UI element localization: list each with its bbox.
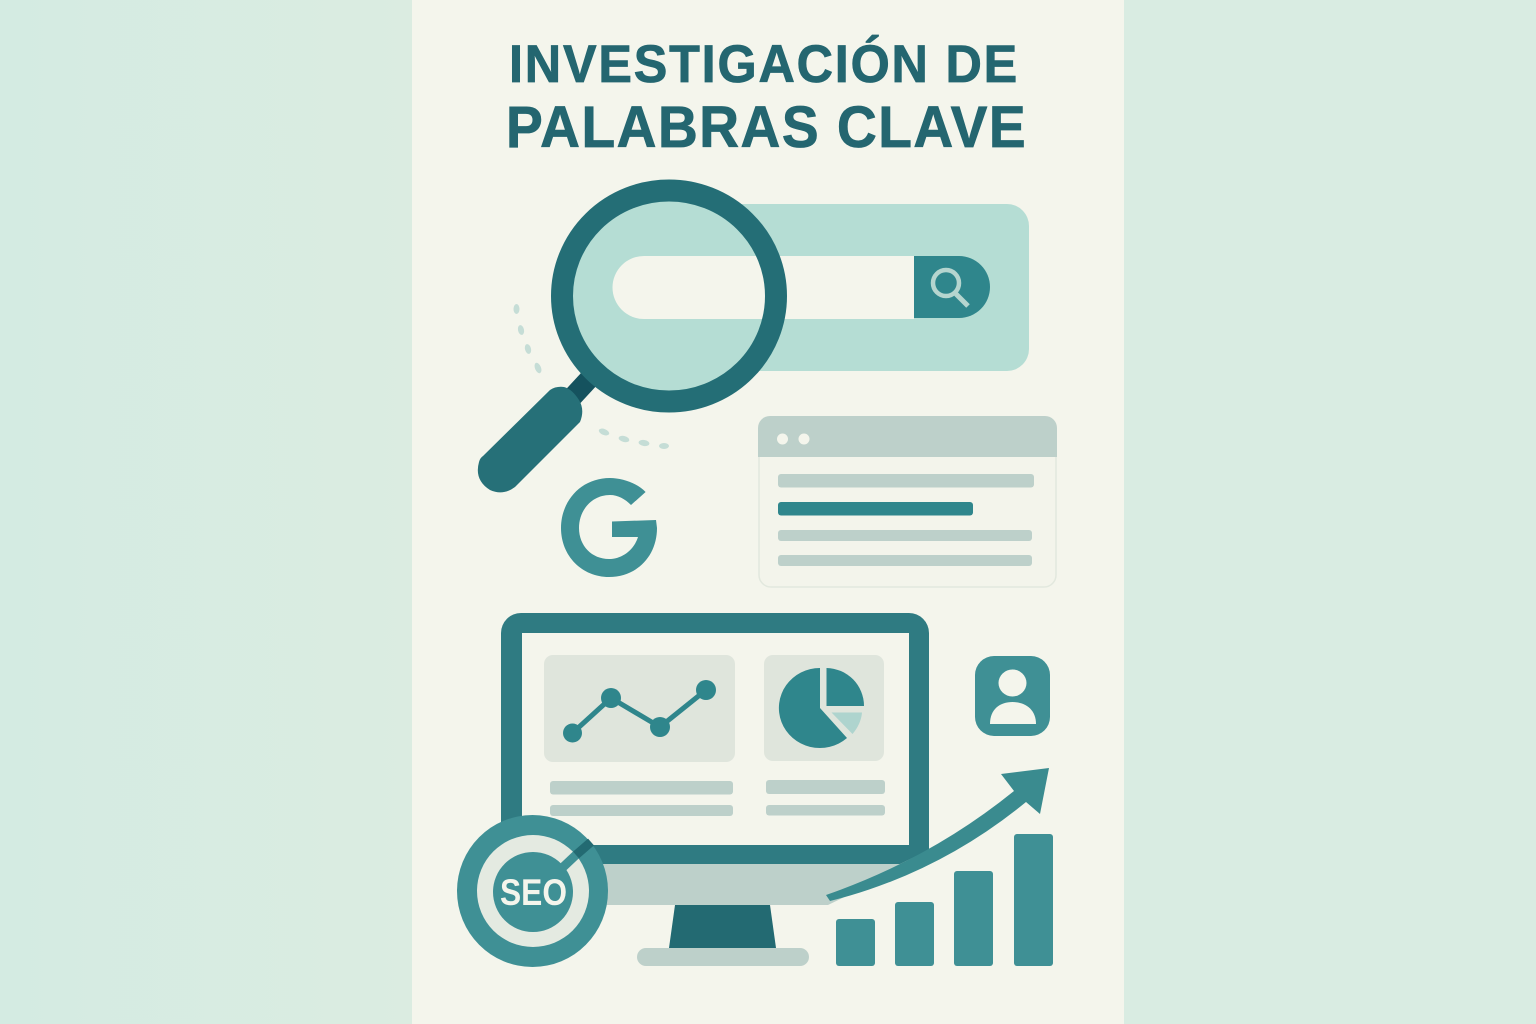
magnifying glass xyxy=(478,190,776,492)
line chart card xyxy=(544,655,735,762)
window dots xyxy=(777,434,810,444)
monitor chin xyxy=(540,860,905,905)
monitor base xyxy=(637,948,809,966)
browser window xyxy=(758,416,1057,587)
monitor screen xyxy=(522,633,909,845)
motion dashes xyxy=(514,304,669,449)
search bar panel xyxy=(570,198,1029,394)
SEO label: SEO xyxy=(500,872,567,913)
desktop monitor xyxy=(501,613,929,966)
left text lines xyxy=(550,781,733,816)
monitor stand xyxy=(669,905,776,948)
central cream panel xyxy=(412,0,1124,1024)
right text lines xyxy=(766,780,885,816)
search input field xyxy=(613,256,914,319)
growth arrow xyxy=(826,768,1049,901)
magnifier lens xyxy=(570,198,770,394)
search button xyxy=(914,256,990,318)
monitor frame xyxy=(501,613,929,864)
left background band xyxy=(0,0,412,1024)
G logo xyxy=(561,478,657,577)
title: PALABRAS CLAVE xyxy=(506,95,1026,159)
result lines xyxy=(778,474,1034,566)
title: INVESTIGACIÓN DE xyxy=(509,34,1017,93)
growth bars xyxy=(836,834,1053,966)
SEO badge xyxy=(457,815,608,967)
title xyxy=(506,34,1026,159)
pie chart card xyxy=(764,655,884,761)
user icon xyxy=(975,656,1050,736)
browser header bar xyxy=(758,416,1057,457)
